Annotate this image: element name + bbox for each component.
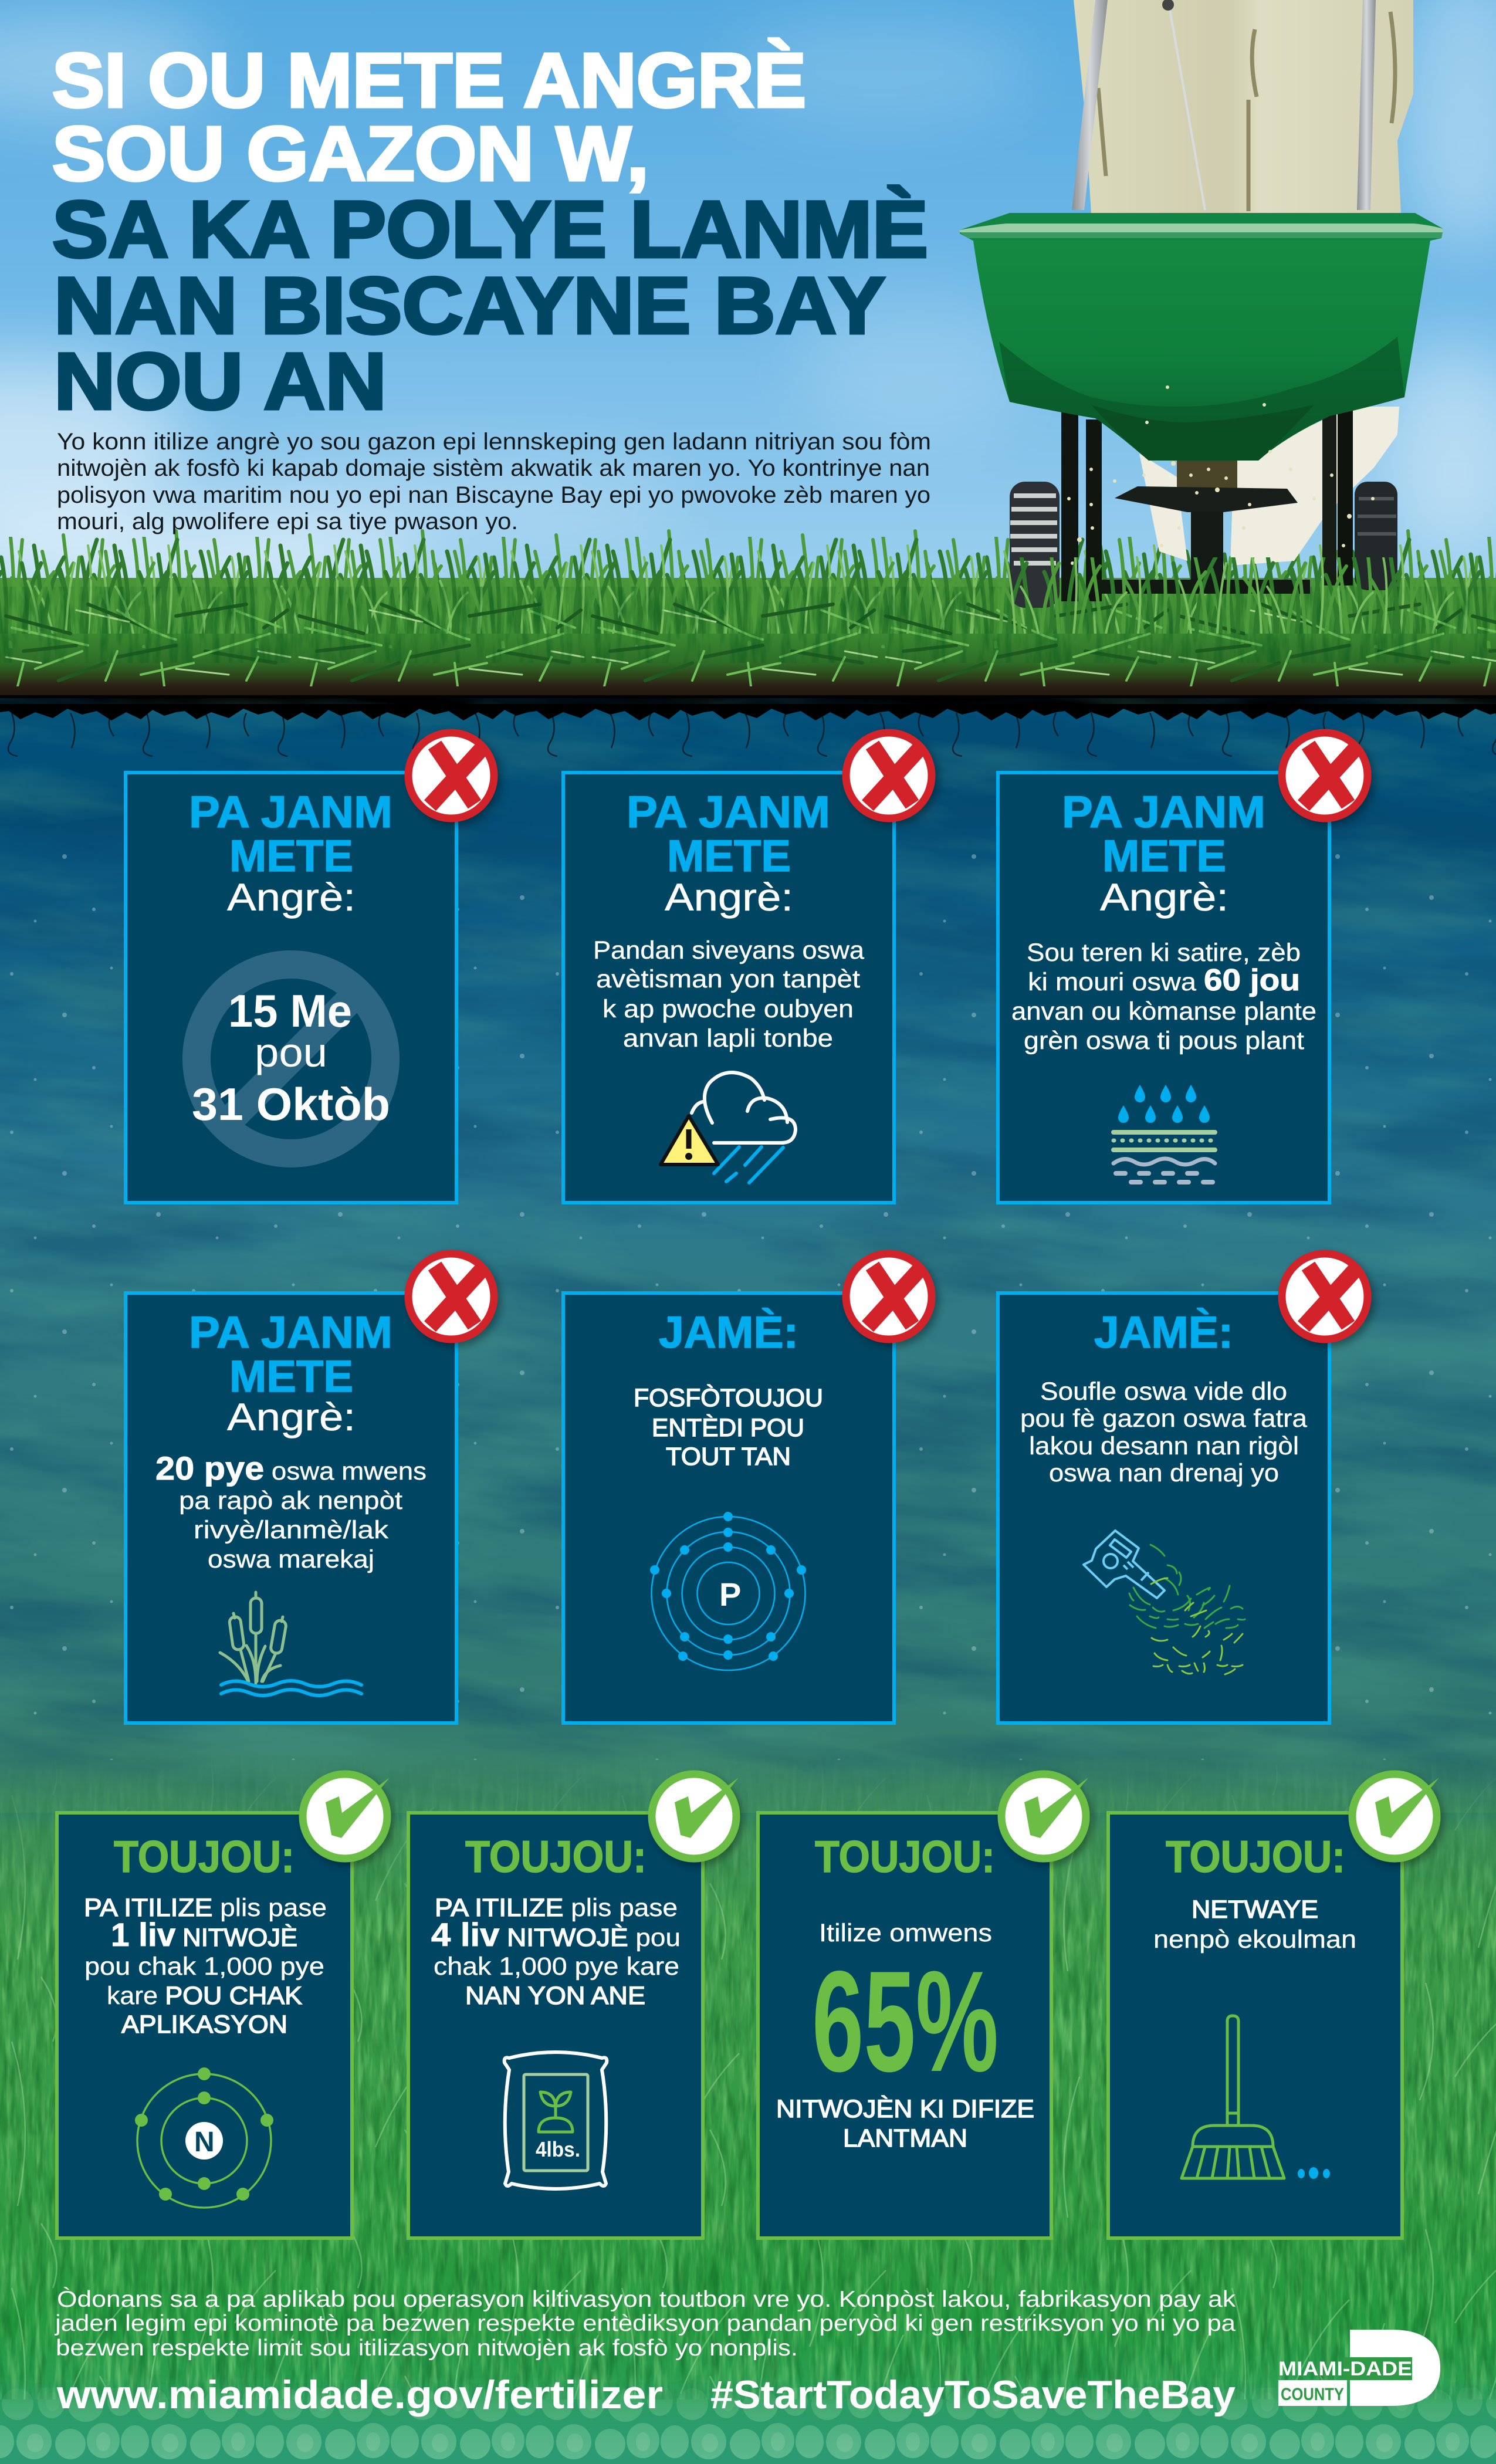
heading: TOUJOU:	[114, 1832, 295, 1882]
icon: nitrogen atom	[135, 2067, 273, 2208]
body text: ENTÈDI POU	[652, 1414, 804, 1442]
title: NOU AN	[54, 337, 387, 427]
heading: Angrè:	[227, 875, 356, 919]
icon: water drops on soil layers	[1113, 1085, 1215, 1182]
body text: FOSFÒTOUJOU	[634, 1384, 823, 1412]
icon: prohibition ring	[197, 964, 385, 1153]
body text	[1153, 1896, 1356, 1954]
heading: METE	[667, 831, 791, 881]
background: water	[0, 698, 1496, 1813]
panel: always 1 lb nitrogen	[57, 1774, 390, 2238]
logo: Miami-Dade County: COUNTY	[1281, 2385, 1344, 2404]
icon: phosphorus atom: P	[719, 1576, 741, 1613]
panel: never blow clippings	[998, 1254, 1368, 1723]
panel: always 4 lb per year	[408, 1774, 739, 2238]
icon: check badge	[652, 1774, 739, 1859]
body text: anvan ou kòmanse plante	[1011, 997, 1316, 1025]
body text: 4 liv NITWOJÈ pou	[431, 1916, 681, 1953]
icon: fertilizer bag	[505, 2052, 607, 2189]
heading: PA JANM	[189, 787, 392, 837]
title: SOU GAZON W,	[52, 110, 649, 197]
dates	[192, 985, 390, 1130]
heading: METE	[1102, 831, 1226, 881]
body text: grèn oswa ti pous plant	[1024, 1027, 1304, 1055]
body text: anvan lapli tonbe	[623, 1024, 833, 1052]
heading: METE	[229, 1352, 353, 1402]
body text: lakou desann nan rigòl	[1029, 1432, 1299, 1460]
body text: NETWAYE	[1192, 1896, 1318, 1924]
title	[52, 37, 928, 427]
icon: check badge	[303, 1774, 390, 1859]
footer note: bezwen respekte limit sou itilizasyon nitwojèn ak fosfò yo nonplis.	[56, 2336, 798, 2361]
footer note: jaden legim epi kominotè pa bezwen respekte entèdiksyon pandan peryòd ki gen restriksyon yo ni yo pa	[55, 2311, 1236, 2336]
body text: ki mouri oswa 60 jou	[1028, 963, 1300, 997]
footer note	[55, 2287, 1236, 2361]
heading: TOUJOU:	[1166, 1832, 1345, 1882]
title: SA KA POLYE LANMÈ	[52, 185, 928, 275]
heading: TOUJOU:	[465, 1832, 647, 1882]
body text: pou chak 1,000 pye	[84, 1952, 324, 1981]
body text	[1011, 939, 1316, 1055]
intro paragraph: Yo konn itilize angrè yo sou gazon epi lennskeping gen ladann nitriyan sou fòm	[57, 429, 931, 455]
body text	[1020, 1377, 1307, 1487]
body text: k ap pwoche oubyen	[603, 995, 854, 1023]
heading: PA JANM	[1062, 787, 1265, 837]
body text	[593, 936, 864, 1052]
panel: always 65 percent slow release	[758, 1774, 1088, 2238]
intro paragraph: mouri, alg pwolifere epi sa tiye pwason yo.	[57, 509, 518, 534]
intro paragraph: polisyon vwa maritim nou yo epi nan Biscayne Bay epi yo pwovoke zèb maren yo	[57, 482, 930, 508]
body text	[634, 1384, 823, 1471]
icon: storm cloud with warning	[661, 1072, 796, 1183]
panel: do not apply during storm warning	[563, 733, 932, 1203]
icon: cattails and water	[220, 1592, 361, 1695]
body text: PA ITILIZE plis pase	[84, 1894, 327, 1922]
icon: x badge	[408, 733, 494, 818]
website url: www.miamidade.gov/fertilizer	[56, 2372, 663, 2417]
body text: PA ITILIZE plis pase	[435, 1894, 678, 1922]
body text: 20 pye oswa mwens	[155, 1450, 427, 1487]
background: lawn strip	[0, 522, 1496, 707]
body text: Itilize omwens	[819, 1919, 992, 1947]
panel: never phosphorus	[563, 1254, 932, 1723]
title: SI OU METE ANGRÈ	[52, 37, 806, 123]
body text: Pandan siveyans oswa	[593, 936, 864, 964]
heading: PA JANM	[189, 1308, 392, 1358]
hashtag: #StartTodayToSaveTheBay	[710, 2372, 1236, 2417]
icon: leaf blower and clippings	[1084, 1531, 1245, 1674]
body text	[431, 1894, 681, 2010]
background: sky with clouds	[0, 0, 1496, 598]
logo: Miami-Dade County	[1278, 2330, 1440, 2406]
icon: x badge	[846, 733, 932, 818]
heading	[189, 1308, 392, 1439]
icon: x badge	[1282, 733, 1368, 818]
body text	[84, 1894, 327, 2039]
dates: pou	[255, 1030, 327, 1075]
icon: x badge	[846, 1254, 932, 1339]
body text: nenpò ekoulman	[1153, 1925, 1356, 1954]
body text: Soufle oswa vide dlo	[1040, 1377, 1287, 1406]
illustration: fertilizer spreader with person	[960, 0, 1443, 634]
body text: LANTMAN	[843, 2124, 967, 2152]
icon: phosphorus atom	[650, 1512, 806, 1670]
body text: APLIKASYON	[121, 2011, 287, 2039]
icon: x badge	[408, 1254, 494, 1339]
icon: check badge	[1001, 1774, 1088, 1859]
icon: nitrogen atom: N	[194, 2127, 215, 2158]
dates: 15 Me	[228, 985, 352, 1037]
background: lawn below water	[0, 1737, 1496, 2464]
heading	[189, 787, 392, 919]
body text: NITWOJÈN KI DIFIZE	[776, 2095, 1034, 2123]
body text: oswa marekaj	[208, 1545, 374, 1573]
icon: broom and spill	[1182, 2016, 1330, 2179]
icon: fertilizer bag: 4lbs.	[536, 2137, 580, 2161]
statistic: 65 percent: 65%	[812, 1941, 999, 2101]
panel: always clean spills	[1108, 1774, 1439, 2238]
heading	[627, 787, 830, 919]
icon: x badge	[1282, 1254, 1368, 1339]
intro paragraph: nitwojèn ak fosfò ki kapab domaje sistèm akwatik ak maren yo. Yo kontrinye nan	[57, 455, 930, 481]
heading: METE	[229, 831, 353, 881]
body text: chak 1,000 pye kare	[434, 1952, 679, 1981]
body text: NAN YON ANE	[465, 1982, 645, 2010]
icon: check badge	[1352, 1774, 1439, 1859]
body text: avètisman yon tanpèt	[596, 965, 860, 993]
body text: pa rapò ak nenpòt	[179, 1487, 402, 1515]
heading: Angrè:	[1100, 875, 1228, 919]
heading: Angrè:	[227, 1395, 356, 1439]
logo: Miami-Dade County: MIAMI-DADE	[1278, 2358, 1412, 2380]
panel: do not apply on saturated ground	[998, 733, 1368, 1203]
intro paragraph	[57, 429, 931, 534]
dates: 31 Oktòb	[192, 1078, 390, 1130]
body text: Sou teren ki satire, zèb	[1027, 939, 1301, 967]
heading: TOUJOU:	[815, 1832, 995, 1882]
body text: pou fè gazon oswa fatra	[1020, 1404, 1307, 1433]
panel: do not apply 15 May to 31 October	[126, 733, 494, 1203]
body text: rivyè/lanmè/lak	[194, 1516, 389, 1544]
heading: Angrè:	[665, 875, 793, 919]
body text: 1 liv NITWOJÈ	[111, 1916, 297, 1953]
panel: 20 feet from water	[126, 1254, 494, 1723]
footer note: Òdonans sa a pa aplikab pou operasyon kiltivasyon toutbon vre yo. Konpòst lakou, fabrikasyon pay ak	[57, 2287, 1236, 2312]
body text: oswa nan drenaj yo	[1049, 1459, 1279, 1487]
heading: PA JANM	[627, 787, 830, 837]
body text: TOUT TAN	[666, 1443, 791, 1471]
heading: JAMÈ:	[1094, 1308, 1233, 1358]
title: NAN BISCAYNE BAY	[54, 261, 885, 351]
heading	[1062, 787, 1265, 919]
body text: kare POU CHAK	[107, 1982, 302, 2010]
body text	[155, 1450, 427, 1573]
heading: JAMÈ:	[659, 1308, 798, 1358]
body text	[776, 2095, 1034, 2152]
